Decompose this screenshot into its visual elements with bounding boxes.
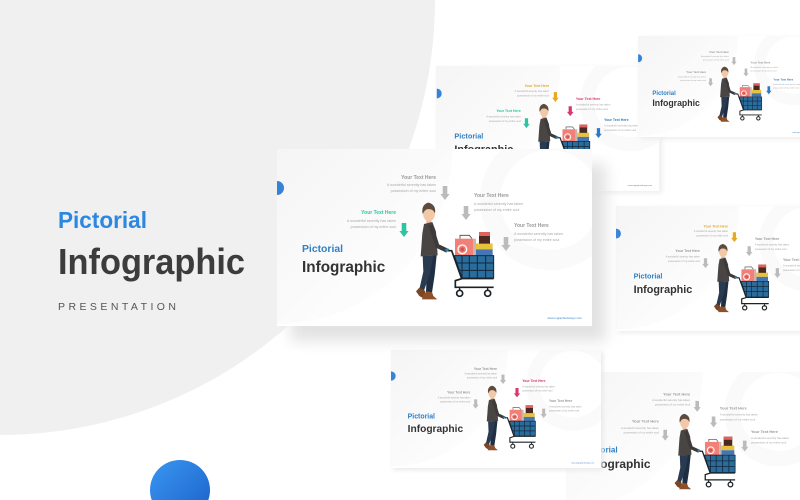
callout: blue [595, 118, 639, 138]
slide: top middle preview [436, 66, 660, 191]
slide title [454, 132, 513, 156]
slide title: Pictorial [454, 132, 483, 141]
callout: grey right: possession of my entire soul [751, 441, 787, 445]
slide: bottom preview [391, 350, 601, 468]
callout: blue: Your Text Here [773, 78, 794, 82]
slide title: Infographic [302, 259, 386, 276]
callout: teal: A wonderful serenity has taken [347, 219, 396, 223]
slide title: Pictorial [408, 414, 435, 421]
callout: grey middle: A wonderful serenity has taken [474, 202, 523, 206]
callout: blue: A wonderful serenity has taken [604, 125, 639, 128]
callout: teal: Your Text Here [361, 210, 396, 216]
heading: Pictorial Infographic: Pictorial [58, 207, 147, 233]
callout: grey middle: Your Text Here [755, 237, 779, 241]
callout: pink: A wonderful serenity has taken [522, 385, 556, 388]
callout: teal: Your Text Here [496, 109, 521, 113]
callout: grey left: A wonderful serenity has taken [621, 426, 659, 430]
callout: grey middle: possession of my entire soul [474, 208, 520, 212]
callout: grey top: Your Text Here [401, 175, 436, 181]
callout: grey top: possession of my entire soul [655, 403, 691, 407]
callout: grey middle [743, 60, 778, 77]
heading: Pictorial Infographic: Infographic [58, 241, 245, 282]
callout: grey right: possession of my entire soul [549, 409, 580, 412]
callout: grey right: Your Text Here [514, 223, 549, 229]
slide title [302, 244, 386, 276]
callout: grey left [666, 249, 709, 268]
illustration: shopper with cart [535, 104, 590, 172]
callout: grey top: Your Text Here [709, 50, 729, 54]
callout: blue: possession of my entire soul [604, 129, 637, 132]
callout: grey right [774, 258, 800, 278]
callout: grey middle [461, 193, 523, 220]
callout: grey left [438, 390, 479, 409]
callout: grey left: Your Text Here [675, 249, 700, 253]
callout: blue: Your Text Here [604, 118, 629, 122]
callout: grey top: possession of my entire soul [703, 59, 729, 62]
callout: grey right [501, 223, 563, 251]
callout: grey middle: possession of my entire soul [720, 417, 755, 421]
callout: pink [567, 97, 611, 116]
callout: yellow: Your Text Here [525, 84, 549, 88]
slide title: Pictorial [634, 272, 662, 281]
callout: grey middle: A wonderful serenity has taken [720, 413, 758, 417]
website text: www.ingraphicdesign.com [571, 462, 595, 464]
top right slide shadow [640, 38, 800, 139]
callout: grey top [387, 175, 450, 200]
callout: yellow: possession of my entire soul [696, 234, 728, 237]
callout: grey middle: Your Text Here [474, 193, 509, 199]
callout: pink: possession of my entire soul [576, 108, 608, 111]
bottom slide shadow [393, 352, 603, 470]
callout: teal [486, 109, 530, 128]
callout: grey top: A wonderful serenity has taken [701, 55, 729, 58]
slide title: Infographic [408, 424, 463, 435]
slide title: Infographic [634, 284, 692, 296]
illustration: shopper with cart [675, 414, 735, 489]
callout: grey middle: A wonderful serenity has taken [751, 66, 778, 69]
slide: right middle preview [616, 208, 800, 331]
callout: teal: possession of my entire soul [351, 225, 396, 229]
illustration: shopper with cart [714, 244, 769, 312]
callout: grey top: possession of my entire soul [467, 377, 497, 380]
slide: main large preview [277, 149, 592, 326]
callout: grey right: Your Text Here [549, 399, 572, 403]
callout: grey top: A wonderful serenity has taken [652, 398, 691, 402]
heading: Pictorial Infographic: PRESENTATION [58, 301, 176, 313]
callout: grey right: possession of my entire soul [514, 238, 560, 242]
slide title: Infographic [586, 457, 651, 471]
callout: grey right [741, 429, 790, 452]
callout: pink: Your Text Here [576, 97, 600, 101]
callout: pink: possession of my entire soul [522, 389, 553, 392]
slide title [634, 272, 692, 296]
callout: grey right [541, 399, 582, 418]
callout: grey middle: Your Text Here [751, 60, 771, 64]
decorative blue circle [150, 460, 210, 500]
right middle slide shadow [618, 208, 800, 333]
callout: blue [766, 78, 800, 94]
callout: grey top [701, 50, 737, 65]
callout: grey top [652, 391, 701, 412]
illustration: shopper with cart [484, 386, 535, 450]
callout: grey top [464, 367, 506, 384]
callout: grey middle [710, 405, 758, 427]
callout: pink [514, 379, 556, 397]
callout: grey left: A wonderful serenity has taken [666, 256, 700, 259]
callout: grey left: possession of my entire soul [624, 431, 659, 435]
illustration: shopper with cart [717, 67, 762, 122]
large grey quarter circle background [0, 0, 435, 435]
callout: grey top: A wonderful serenity has taken [464, 373, 498, 376]
callout: grey middle: possession of my entire soul [755, 248, 787, 251]
callout: pink: A wonderful serenity has taken [576, 104, 611, 107]
callout: yellow: possession of my entire soul [517, 94, 549, 97]
callout: grey left: possession of my entire soul [668, 260, 700, 263]
slide title: Pictorial [586, 445, 618, 454]
slide title [586, 445, 651, 471]
callout: grey middle: Your Text Here [720, 405, 748, 410]
callout: teal [347, 210, 409, 237]
website text: www.ingraphicdesign.com [628, 185, 652, 187]
callout: teal: possession of my entire soul [489, 120, 521, 123]
slide title [652, 91, 700, 108]
top middle slide shadow [438, 68, 662, 193]
main slide shadow [291, 164, 606, 341]
callout: grey right: A wonderful serenity has taken [549, 405, 582, 408]
slide: bottom right preview [586, 372, 790, 490]
callout: grey top: possession of my entire soul [391, 189, 436, 193]
callout: grey left [678, 70, 713, 86]
callout: grey left: Your Text Here [632, 419, 660, 424]
callout: grey right: A wonderful serenity has taken [514, 232, 563, 236]
callout: yellow [515, 84, 559, 102]
callout: grey right: A wonderful serenity has taken [751, 436, 790, 440]
slide title: Infographic [454, 144, 513, 156]
website text: www.ingraphicdesign.com [547, 316, 582, 320]
callout: grey top: Your Text Here [474, 367, 497, 371]
callout: grey left [621, 419, 669, 441]
callout: grey left: A wonderful serenity has taken [678, 76, 706, 79]
callout: grey right: Your Text Here [751, 429, 779, 434]
slide: top right preview [638, 36, 800, 137]
heading: Pictorial Infographic [58, 207, 245, 313]
callout: pink: Your Text Here [522, 379, 546, 383]
callout: yellow: A wonderful serenity has taken [694, 230, 729, 233]
callout: yellow: A wonderful serenity has taken [515, 90, 550, 93]
callout: teal: A wonderful serenity has taken [486, 116, 521, 119]
slide title: Pictorial [302, 244, 343, 255]
callout: grey middle: possession of my entire soul [751, 69, 777, 72]
slide title [408, 414, 463, 435]
callout: grey middle [746, 237, 790, 256]
callout: grey left: possession of my entire soul [440, 401, 471, 404]
callout: grey left: possession of my entire soul [680, 79, 707, 82]
callout: grey left: A wonderful serenity has taken [438, 397, 471, 400]
illustration: shopper with cart [416, 203, 494, 299]
callout: grey top: Your Text Here [663, 391, 691, 396]
callout: grey left: Your Text Here [686, 70, 706, 74]
callout: grey left: Your Text Here [447, 390, 470, 394]
callout: blue: possession of my entire soul [773, 86, 800, 89]
callout: yellow [694, 224, 738, 242]
callout: yellow: Your Text Here [704, 224, 728, 228]
callout: grey top: A wonderful serenity has taken [387, 183, 436, 187]
slide title: Pictorial [652, 91, 676, 97]
callout: grey middle: A wonderful serenity has taken [755, 244, 790, 247]
slide title: Infographic [652, 98, 700, 108]
